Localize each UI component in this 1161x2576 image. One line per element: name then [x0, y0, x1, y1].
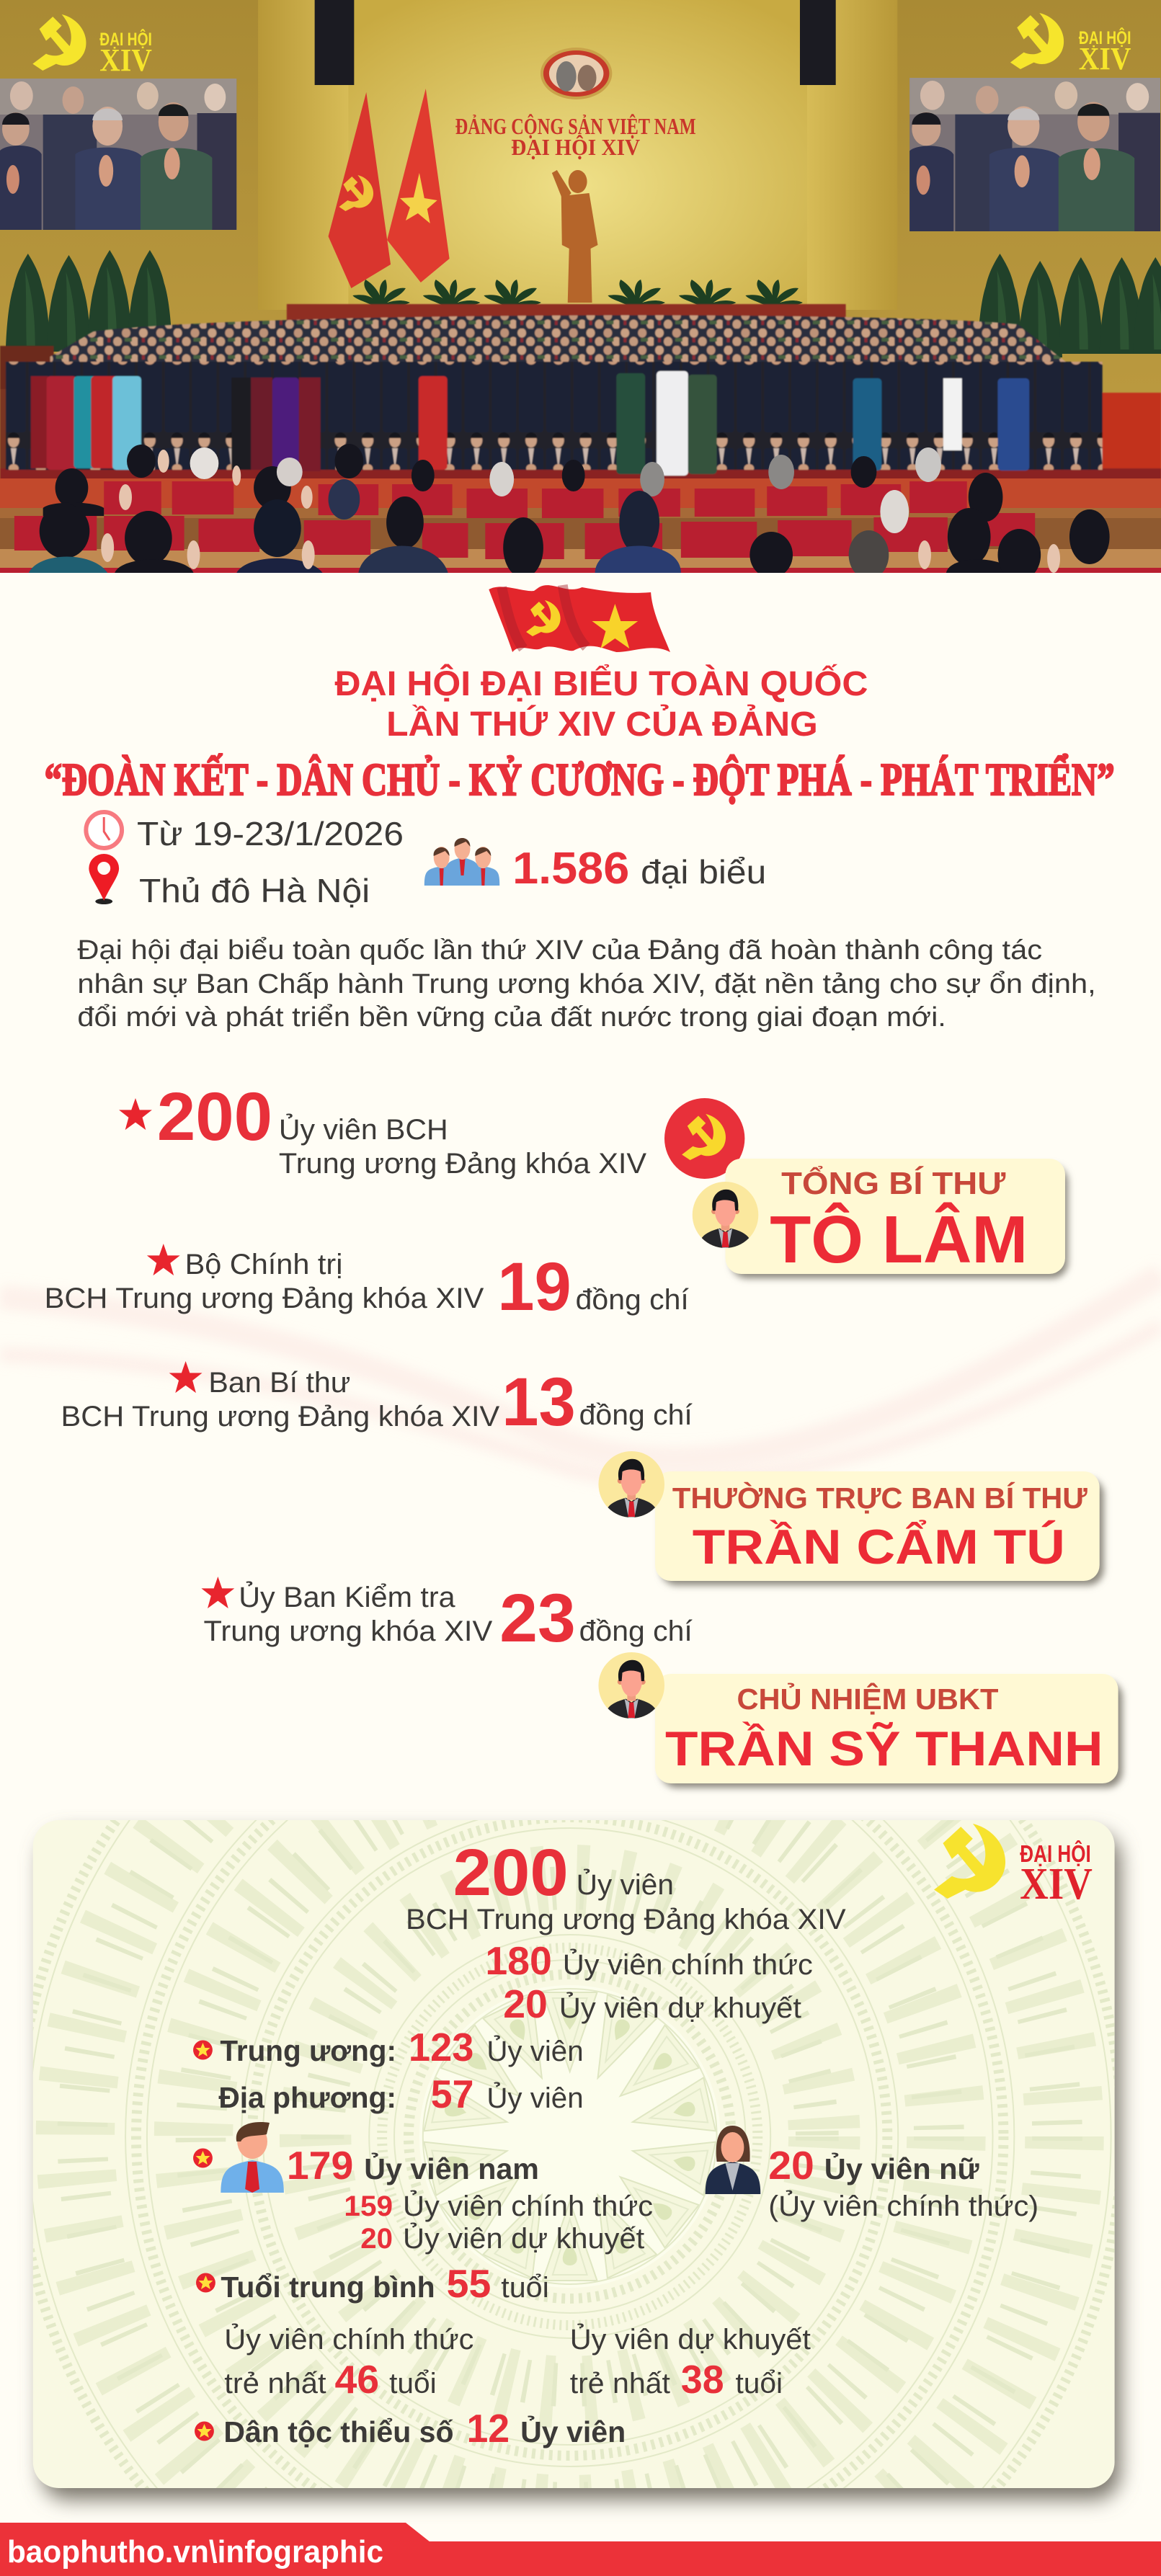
ethnic minorities: 12 — [466, 2406, 510, 2451]
plants — [352, 280, 803, 305]
icon: location pin — [89, 854, 119, 904]
footer bar: baophutho.vn\infographic — [7, 2534, 383, 2570]
avatar: Trần Cẩm Tú — [598, 1451, 664, 1518]
youngest official: Ủy viên chính thức — [224, 2322, 473, 2356]
stat: secretariat: 13 — [502, 1364, 576, 1440]
party flags — [489, 585, 670, 652]
stat: secretariat: Ban Bí thư — [208, 1367, 350, 1399]
average age: tuổi — [501, 2272, 549, 2304]
central and local: Địa phương: — [218, 2081, 396, 2114]
average age — [196, 2261, 549, 2306]
youngest official: tuổi — [389, 2368, 437, 2399]
official and alternate: 20 — [503, 1982, 548, 2026]
intro paragraph: Đại hội đại biểu toàn quốc lần thứ XIV của Đảng đã hoàn thành công tác — [77, 935, 1042, 966]
youngest alternate: Ủy viên dự khuyết — [570, 2322, 811, 2356]
panel: central committee statistics — [27, 1818, 1135, 2515]
male members: 159 — [344, 2191, 393, 2222]
delegates count: 1.586 — [512, 844, 629, 893]
stat: secretariat: BCH Trung ương Đảng khóa XIV — [61, 1401, 500, 1432]
official and alternate — [485, 1938, 813, 2026]
central and local: Trung ương: — [220, 2034, 396, 2067]
logo top-right: XIV — [1079, 42, 1131, 76]
official and alternate: Ủy viên chính thức — [563, 1948, 813, 1981]
icon: man — [221, 2122, 284, 2193]
pine trees — [6, 250, 1161, 357]
drum pattern background — [33, 1820, 1115, 2488]
logo top-left — [32, 14, 151, 71]
total members: BCH Trung ương Đảng khóa XIV — [406, 1904, 846, 1935]
stat: 200 members: Ủy viên BCH — [279, 1113, 448, 1146]
youngest alternate: trẻ nhất — [570, 2368, 670, 2399]
badge: standing secretary: THƯỜNG TRỰC BAN BÍ THƯ — [672, 1481, 1087, 1515]
title: ĐẠI HỘI ĐẠI BIỂU TOÀN QUỐC — [334, 664, 868, 703]
intro paragraph: đổi mới và phát triển bền vững của đất nước trong giai đoạn mới. — [77, 1002, 946, 1033]
badge: inspection chairman: TRẦN SỸ THANH — [665, 1721, 1103, 1776]
stat: inspection commission: 23 — [499, 1580, 576, 1657]
intro paragraph: nhân sự Ban Chấp hành Trung ương khóa XIV, đặt nền tảng cho sự ổn định, — [77, 969, 1096, 999]
stat: politburo: 19 — [497, 1249, 571, 1325]
badge: standing secretary: TRẦN CẨM TÚ — [693, 1519, 1065, 1574]
badge: general secretary: TỔNG BÍ THƯ — [781, 1164, 1006, 1201]
stage wall lettering: ĐẠI HỘI XIV — [511, 135, 640, 160]
ethnic minorities — [195, 2406, 626, 2451]
stat: inspection commission — [201, 1577, 693, 1657]
statue — [552, 170, 597, 303]
total members: 200 — [453, 1836, 569, 1909]
icon: woman — [706, 2126, 760, 2194]
female members: 20 — [768, 2143, 814, 2188]
emblem on stage wall — [541, 48, 612, 99]
youngest official: trẻ nhất — [224, 2368, 326, 2399]
youngest alternate: 38 — [681, 2357, 724, 2402]
male members: 20 — [360, 2223, 393, 2255]
central and local: 57 — [431, 2072, 473, 2116]
stat: politburo — [45, 1244, 689, 1325]
logo top-left: ĐẠI HỘI — [99, 28, 152, 50]
stat: politburo: đồng chí — [576, 1284, 689, 1316]
title: LẦN THỨ XIV CỦA ĐẢNG — [386, 704, 818, 744]
badge: standing secretary — [655, 1471, 1104, 1585]
stat: secretariat: đồng chí — [579, 1399, 693, 1431]
badge: inspection chairman — [655, 1674, 1123, 1788]
official and alternate: Ủy viên dự khuyết — [559, 1991, 801, 2024]
icon: party emblem — [664, 1098, 744, 1179]
icon: delegates — [424, 838, 499, 886]
delegates count: đại biểu — [641, 853, 766, 891]
male members: Ủy viên chính thức — [403, 2189, 653, 2222]
avatar: Tô Lâm — [693, 1182, 758, 1249]
female members: (Ủy viên chính thức) — [768, 2189, 1038, 2222]
screen left — [0, 79, 236, 230]
central and local: 123 — [409, 2025, 473, 2069]
footer bar — [0, 2523, 1161, 2576]
stage wall lettering — [455, 114, 696, 160]
average age: Tuổi trung bình — [221, 2270, 435, 2304]
title — [334, 664, 868, 744]
flags — [329, 89, 450, 288]
stat: secretariat — [61, 1361, 693, 1440]
ethnic minorities: Dân tộc thiểu số — [223, 2415, 454, 2448]
male members — [287, 2143, 653, 2255]
youngest alternate — [570, 2322, 811, 2402]
screen right — [909, 78, 1160, 231]
total members: Ủy viên — [577, 1868, 674, 1901]
logo top-right — [1010, 13, 1131, 70]
audience seats — [0, 444, 1161, 581]
average age: 55 — [447, 2261, 491, 2306]
youngest official: 46 — [334, 2357, 379, 2402]
stat: 200 members: Trung ương Đảng khóa XIV — [279, 1148, 647, 1180]
background waves — [0, 1275, 1161, 1481]
total members — [406, 1836, 846, 1935]
stat: 200 members — [119, 1079, 647, 1180]
delegates count — [512, 844, 766, 893]
male members: 179 — [287, 2143, 353, 2188]
panel logo: ĐẠI HỘI — [1020, 1840, 1091, 1867]
male members: Ủy viên nam — [364, 2152, 539, 2185]
central and local — [193, 2025, 584, 2116]
badge: general secretary: TÔ LÂM — [770, 1202, 1028, 1277]
official and alternate: 180 — [485, 1938, 552, 1983]
male members: Ủy viên dự khuyết — [403, 2221, 644, 2255]
badge: general secretary — [726, 1159, 1068, 1278]
crowd — [0, 304, 1161, 490]
panel logo — [934, 1824, 1093, 1909]
stat: 200 members: 200 — [157, 1079, 272, 1155]
central and local: Ủy viên — [486, 2034, 584, 2067]
stat: politburo: Bộ Chính trị — [185, 1249, 342, 1280]
icon: clock — [86, 812, 122, 848]
stat: inspection commission: Ủy Ban Kiểm tra — [239, 1580, 455, 1613]
ethnic minorities: Ủy viên — [520, 2415, 626, 2448]
female members: Ủy viên nữ — [824, 2152, 979, 2185]
panel logo: XIV — [1020, 1860, 1093, 1909]
stat: inspection commission: đồng chí — [579, 1615, 693, 1647]
youngest alternate: tuổi — [735, 2368, 783, 2399]
date: Từ 19-23/1/2026 — [137, 815, 404, 852]
youngest official — [224, 2322, 473, 2402]
intro paragraph — [77, 935, 1096, 1033]
logo top-right: ĐẠI HỘI — [1079, 27, 1131, 48]
logo top-left: XIV — [99, 43, 152, 78]
place: Thủ đô Hà Nội — [139, 872, 370, 909]
badge: inspection chairman: CHỦ NHIỆM UBKT — [737, 1683, 999, 1716]
stat: politburo: BCH Trung ương Đảng khóa XIV — [45, 1283, 484, 1314]
avatar: Trần Sỹ Thanh — [598, 1652, 664, 1719]
female members — [768, 2143, 1038, 2222]
central and local: Ủy viên — [486, 2081, 584, 2114]
stat: inspection commission: Trung ương khóa XIV — [203, 1615, 493, 1647]
hero photo: congress delegates — [0, 0, 1161, 581]
stage wall lettering: ĐẢNG CỘNG SẢN VIỆT NAM — [455, 114, 696, 139]
